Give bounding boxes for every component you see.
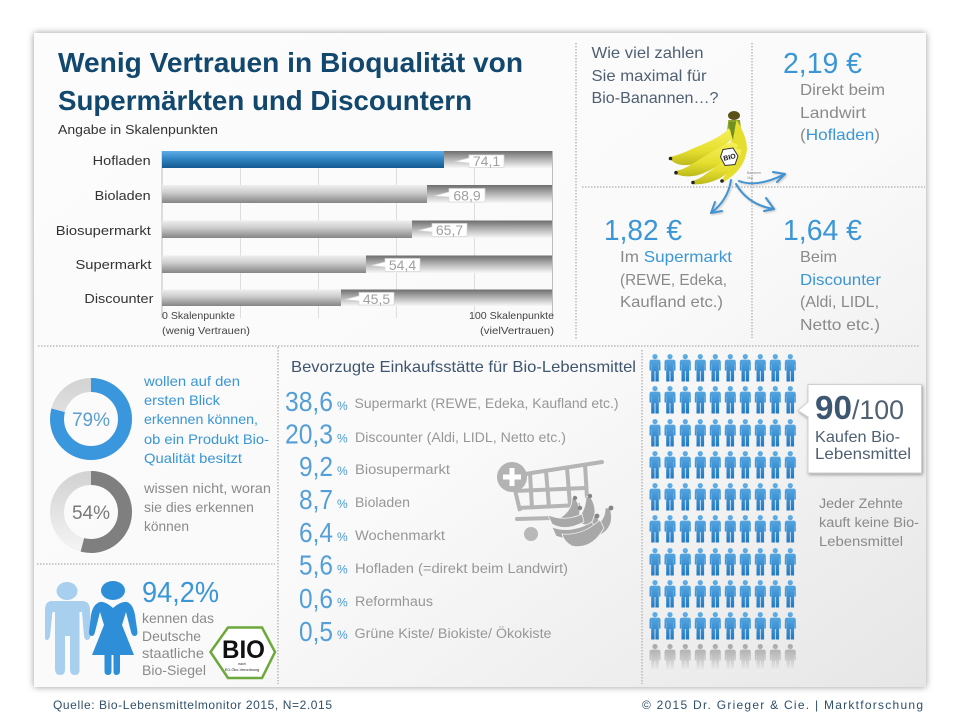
tiny banana note: Bananen <box>747 171 761 175</box>
list: preferred stores: Supermarkt (REWE, Edeka, Kaufland etc.) <box>354 396 618 411</box>
category labels: Biosupermarkt <box>56 223 151 238</box>
donut: 79% <box>57 385 125 453</box>
price: Discounter: 1,64 € <box>783 215 862 247</box>
value label: 45,5 <box>345 291 394 307</box>
bar: Supermarkt <box>162 256 366 273</box>
note: one in ten <box>819 496 919 549</box>
category labels: Supermarkt <box>76 257 152 272</box>
list: preferred stores: 38,6 <box>285 386 333 417</box>
price: Supermarkt: (REWE, Edeka, <box>620 272 727 289</box>
price: Discounter: Discounter <box>800 272 882 289</box>
arrow: to Supermarkt <box>711 180 731 213</box>
price: Discounter: (Aldi, LIDL, <box>800 294 879 311</box>
list: preferred stores: Hofladen (=direkt beim Landwirt) <box>355 561 568 576</box>
callout: 90/100: 90 <box>815 389 852 426</box>
donut: 54% <box>57 478 125 546</box>
bar: Bioladen <box>162 185 427 203</box>
list: preferred stores: Bioladen <box>355 495 410 510</box>
list: preferred stores: 9,2 <box>299 451 333 482</box>
icon: shopping cart with bananas <box>497 462 613 547</box>
axis labels: 0 Skalenpunkte <box>162 310 235 322</box>
callout: 90/100: Lebensmittel <box>815 446 911 463</box>
tiny banana note: 1kg <box>747 176 753 180</box>
list: preferred stores: 0,6 <box>299 583 333 614</box>
callout: 90/100: /100 <box>852 395 904 425</box>
footer: source: Quelle: Bio-Lebensmittelmonitor 2015, N=2.015 <box>53 698 332 712</box>
stat: 94,2%: kennen das <box>142 610 214 626</box>
icon: man <box>45 582 90 675</box>
grid lines <box>240 151 474 318</box>
icon: Bio seal: BIO <box>222 636 265 664</box>
value label: 68,9: 68,9 <box>453 188 481 204</box>
price: Hofladen: Landwirt <box>800 105 867 122</box>
list: preferred stores: Biosupermarkt <box>355 462 450 477</box>
text: 79% statement: ersten Blick <box>144 392 221 408</box>
axis labels: 100 Skalenpunkte <box>469 310 554 322</box>
list: preferred stores: 20,3 <box>285 418 333 450</box>
category labels: Discounter <box>84 291 154 306</box>
category labels <box>56 153 154 306</box>
price: Hofladen: 2,19 € <box>783 48 862 80</box>
title <box>58 47 523 116</box>
list: preferred stores: Reformhaus <box>355 594 433 609</box>
list: preferred stores: % <box>337 530 348 544</box>
title: Wenig Vertrauen in Bioqualität von <box>58 47 523 78</box>
title: Supermärkten und Discountern <box>58 85 472 116</box>
stat: 94,2%: 94,2% <box>142 577 219 609</box>
question text <box>592 45 719 107</box>
text: 79% statement: erkennen können, <box>144 411 258 427</box>
text: 79% statement <box>143 373 269 466</box>
value label: 74,1 <box>455 153 504 169</box>
heading: preferred stores: Bevorzugte Einkaufsstätte für Bio-Lebensmittel <box>291 359 636 376</box>
arrow: to Discounter <box>736 184 774 211</box>
price: Supermarkt: Im Supermarkt <box>620 249 733 266</box>
axis labels <box>162 310 554 337</box>
note: one in ten: Lebensmittel <box>819 534 903 549</box>
category labels: Bioladen <box>95 188 151 203</box>
stat: 94,2%: Deutsche <box>142 628 201 644</box>
list: preferred stores: Discounter (Aldi, LIDL, Netto etc.) <box>355 430 566 445</box>
list: preferred stores: 6,4 <box>299 517 333 548</box>
bar: Discounter <box>162 290 341 306</box>
question text: Bio-Banannen…? <box>592 90 719 107</box>
list: preferred stores: % <box>337 596 348 610</box>
axis labels: (vielVertrauen) <box>480 325 554 337</box>
list: preferred stores: Grüne Kiste/ Biokiste/ Ökokiste <box>354 626 552 641</box>
price: Discounter: Beim <box>800 249 837 266</box>
price: Hofladen <box>783 48 885 144</box>
footer: copyright: © 2015 Dr. Grieger & Cie. | Marktforschung <box>642 698 923 712</box>
list: preferred stores: % <box>337 562 348 576</box>
note: one in ten: Jeder Zehnte <box>819 496 903 511</box>
callout: 90/100: Kaufen Bio- <box>815 429 900 446</box>
tiny banana note <box>747 171 761 180</box>
price: Hofladen: Direkt beim <box>800 82 885 99</box>
value label: 54,4: 54,4 <box>389 257 416 273</box>
stat: 94,2%: staatliche <box>142 645 204 661</box>
list: preferred stores <box>285 386 618 647</box>
value label: 45,5: 45,5 <box>363 291 390 307</box>
list: preferred stores: 0,5 <box>299 616 333 647</box>
callout: 90/100 <box>798 384 922 473</box>
icon: woman <box>89 581 138 675</box>
note: one in ten: kauft keine Bio- <box>819 515 919 530</box>
list: preferred stores: % <box>337 399 348 413</box>
bar: Hofladen <box>162 151 444 168</box>
icon: Bio seal: nach <box>238 662 246 666</box>
list: preferred stores: % <box>337 497 348 511</box>
value label: 74,1: 74,1 <box>473 153 500 169</box>
text: 54% statement: wissen nicht, woran <box>143 480 271 496</box>
question text: Sie maximal für <box>592 68 707 85</box>
donut: 79%: 79% <box>72 410 110 431</box>
bar tracks <box>162 151 552 306</box>
list: preferred stores: % <box>337 432 348 446</box>
value label: 65,7 <box>418 222 467 238</box>
bar: Biosupermarkt <box>162 220 412 238</box>
icon: banana bunch <box>669 111 747 184</box>
list: preferred stores: 5,6 <box>299 550 333 580</box>
stat: 94,2% <box>142 577 219 678</box>
text: 54% statement: sie dies erkennen <box>144 499 254 515</box>
list: preferred stores: % <box>337 628 348 642</box>
icon: Bio seal <box>210 628 275 678</box>
price: Discounter <box>783 215 882 334</box>
bar chart: trust <box>56 151 554 337</box>
text: 79% statement: Qualität besitzt <box>144 450 242 466</box>
pictogram: 100 persons <box>650 354 796 672</box>
stat: 94,2%: Bio-Siegel <box>142 662 206 678</box>
text: 54% statement: können <box>144 518 189 534</box>
price: Supermarkt: Kaufland etc.) <box>620 294 723 311</box>
text: 54% statement <box>143 480 271 534</box>
text: 79% statement: ob ein Produkt Bio- <box>144 431 269 447</box>
donut: 54%: 54% <box>72 503 110 524</box>
price: Supermarkt <box>604 215 733 311</box>
list: preferred stores: Wochenmarkt <box>355 528 445 543</box>
bio sticker: BIO <box>723 153 737 163</box>
list: preferred stores: 8,7 <box>299 484 333 515</box>
subtitle: Angabe in Skalenpunkten <box>58 123 218 137</box>
icon: Bio seal: EG-Öko-Verordnung <box>225 668 259 672</box>
price: Hofladen: (Hofladen ) <box>800 127 880 144</box>
value label: 54,4 <box>371 257 420 273</box>
value label: 68,9 <box>434 188 485 204</box>
axis labels: (wenig Vertrauen) <box>162 325 250 337</box>
price: Discounter: Netto etc.) <box>800 317 880 334</box>
list: preferred stores: % <box>337 464 348 478</box>
category labels: Hofladen <box>93 153 151 168</box>
value label: 65,7: 65,7 <box>436 222 463 238</box>
text: 79% statement: wollen auf den <box>143 373 240 389</box>
price: Supermarkt: 1,82 € <box>604 215 682 247</box>
arrow: to Hofladen <box>739 172 785 183</box>
question text: Wie viel zahlen <box>592 45 704 62</box>
